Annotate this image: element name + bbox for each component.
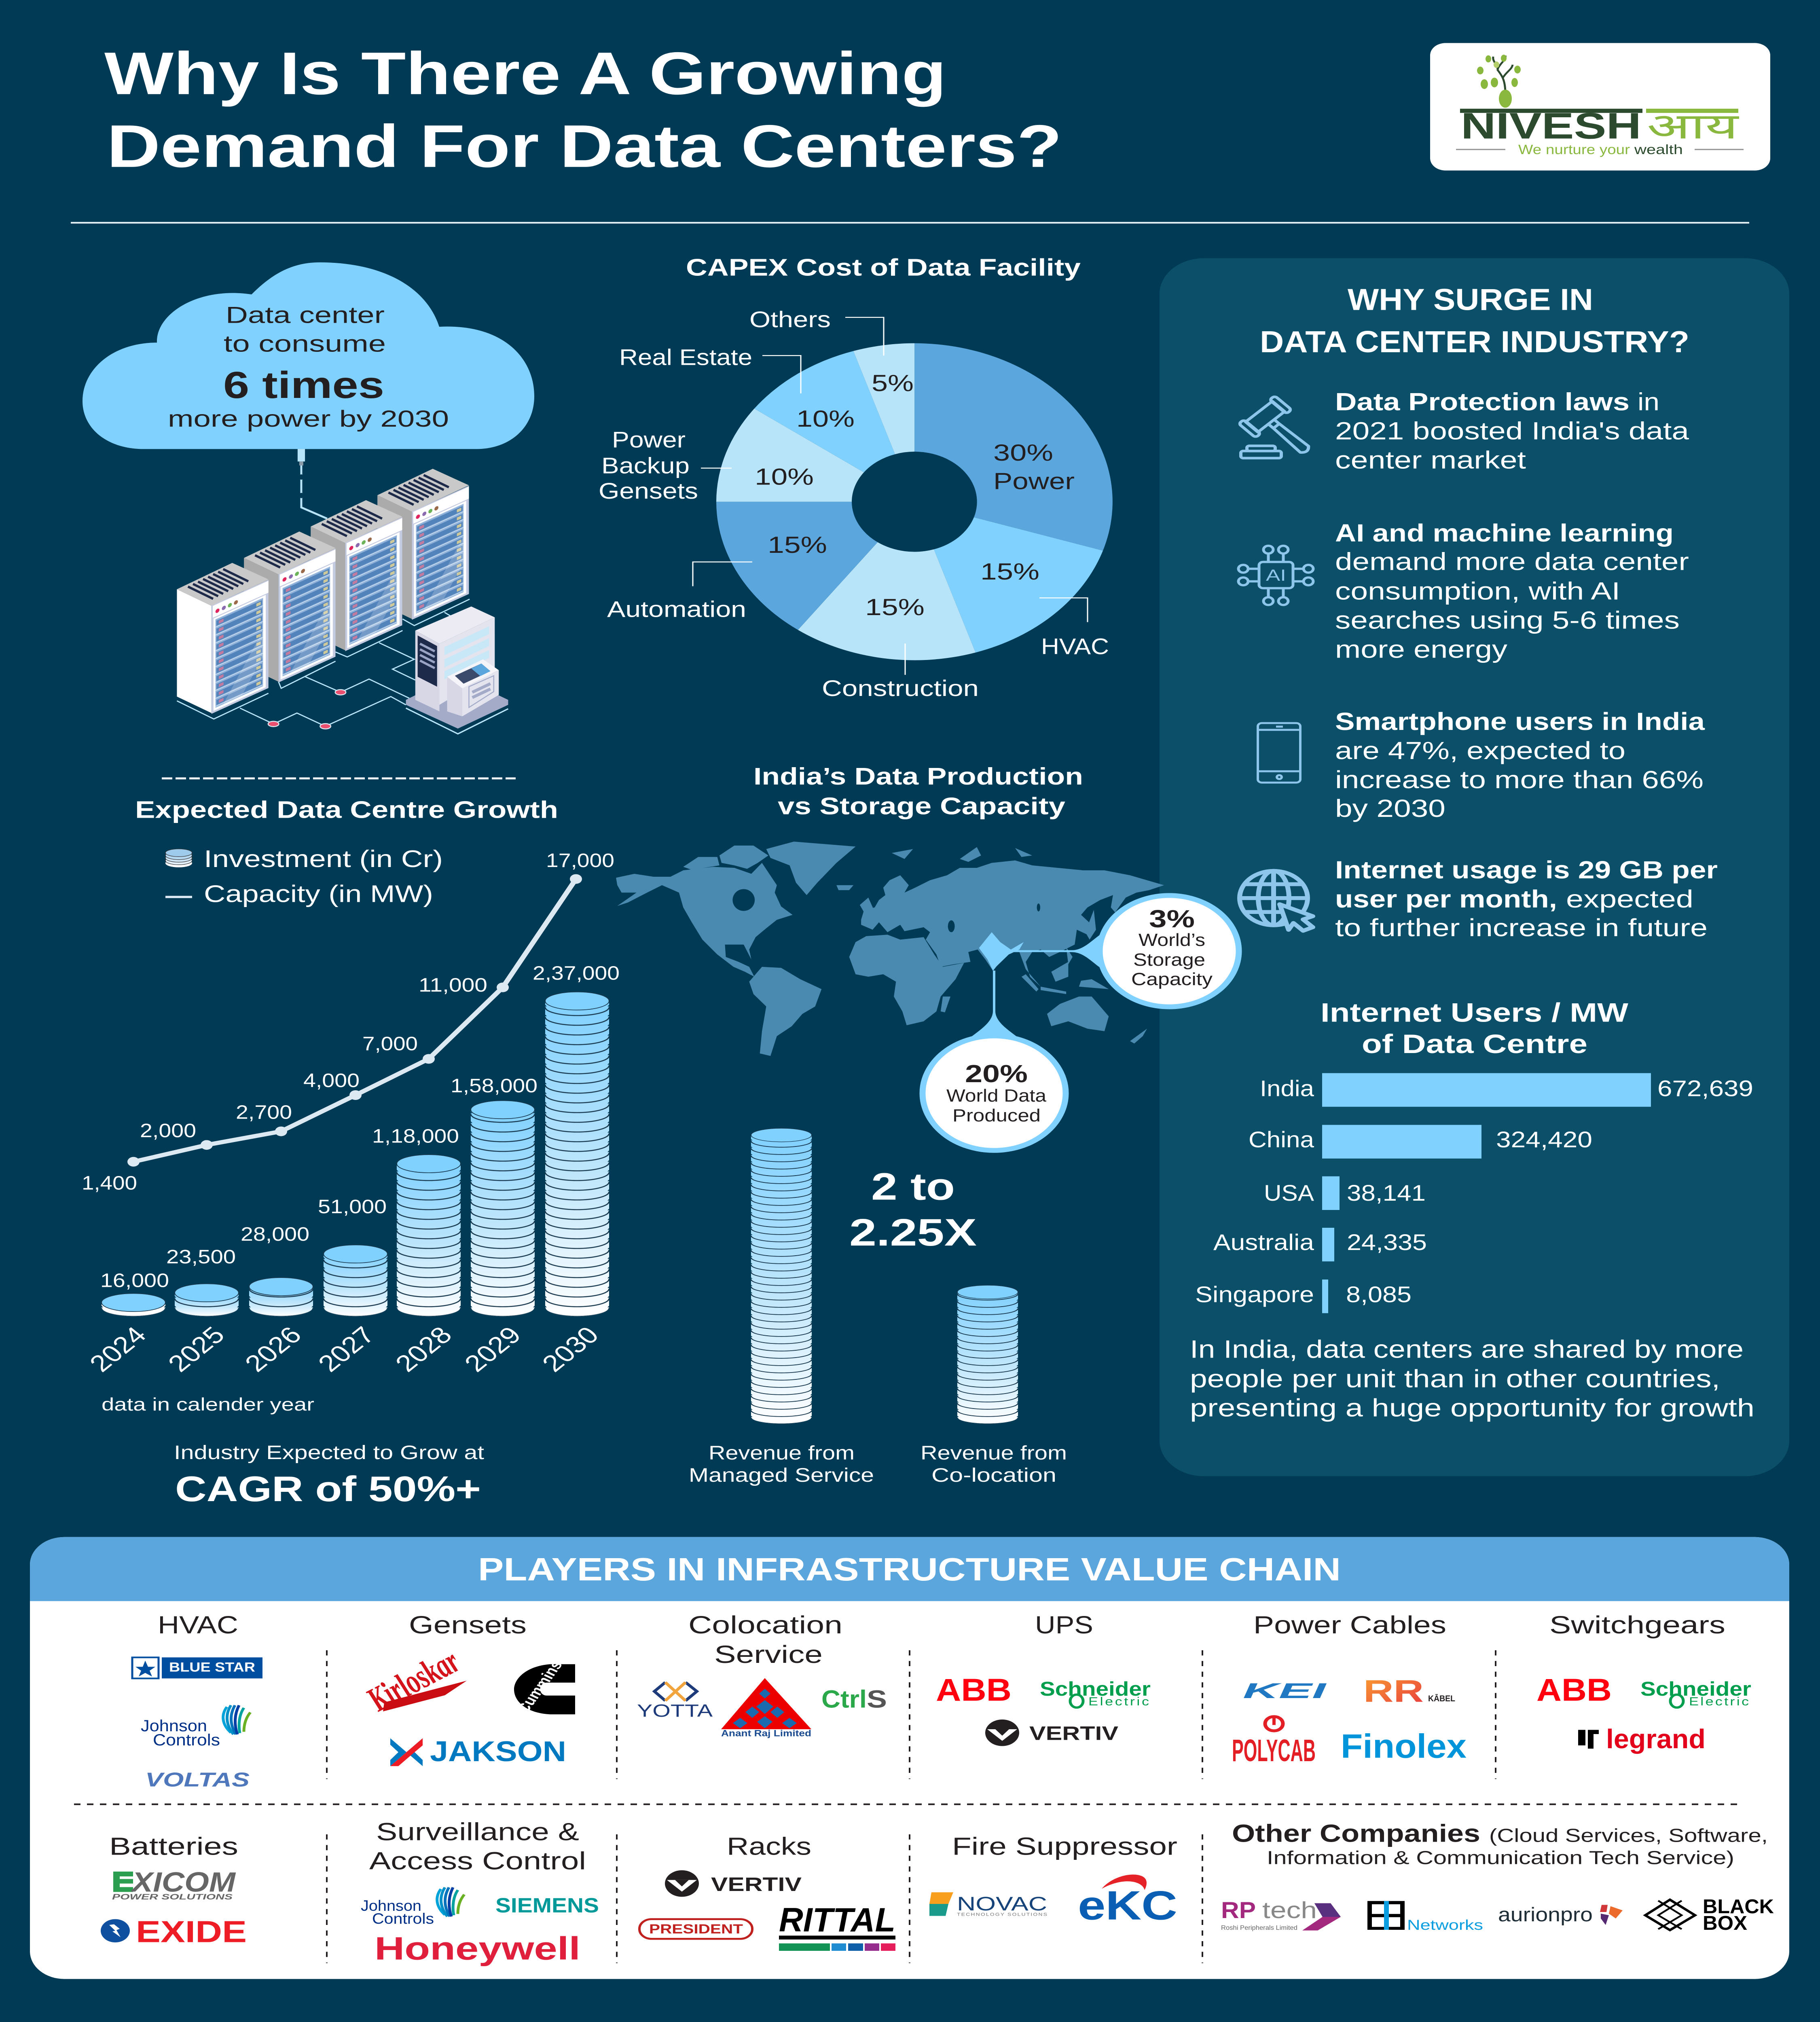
callout: 3% storage: [1100, 895, 1239, 1007]
header divider: [71, 222, 1749, 224]
icon: smartphone: [1258, 723, 1300, 783]
logo: RP tech: tech: [1262, 1897, 1317, 1923]
stack 2027: [324, 1245, 387, 1316]
bar chart: internet users per MW: 24,335: [1347, 1230, 1427, 1255]
callout: 20% data produced: World Data: [946, 1086, 1047, 1106]
year axis labels: 2028: [389, 1322, 458, 1377]
callout: 2 to 2.25X: 2 to: [871, 1165, 955, 1208]
illustration: server racks: [177, 449, 508, 734]
category headings: Surveillance &: [376, 1818, 579, 1846]
segment labels: HVAC: [1041, 634, 1109, 659]
logo: RP tech: Roshi Peripherals Limited: [1221, 1924, 1297, 1931]
text: AI and machine learning: AI and machine learning: [1335, 519, 1674, 547]
stack captions: [689, 1442, 1067, 1486]
category headings: Racks: [727, 1833, 811, 1860]
capacity and investment value labels: 11,000: [419, 974, 487, 996]
capacity and investment value labels: 2,37,000: [533, 962, 620, 984]
console unit: [406, 607, 508, 734]
bar chart: internet users per MW: 38,141: [1347, 1180, 1426, 1206]
panel heading: WHY SURGE IN: [1348, 283, 1593, 317]
logo: Kirloskar: [358, 1643, 469, 1718]
text: internet usage: expected: [1566, 885, 1693, 913]
stack captions: Co-location: [931, 1464, 1056, 1486]
callout: 3% storage: 3%: [1149, 905, 1195, 933]
logo: networks: [1367, 1901, 1483, 1933]
text: AI and machine learning: [1335, 519, 1689, 663]
segment labels: Others: [749, 307, 831, 332]
cable from cloud: [298, 449, 327, 518]
capacity and investment value labels: 4,000: [303, 1070, 360, 1091]
year axis labels: 2027: [312, 1322, 381, 1377]
text: India data center note: people per unit than in other countries,: [1190, 1364, 1720, 1393]
logo: Schneider Electric (UPS): Schneider: [1040, 1677, 1151, 1700]
callout: 20% data produced: Produced: [952, 1106, 1041, 1125]
category headings: Switchgears: [1549, 1611, 1725, 1639]
capacity and investment value labels: 23,500: [166, 1246, 236, 1268]
text: data protection laws: Data Protection laws: [1335, 388, 1630, 416]
callout: 3% storage: Capacity: [1131, 970, 1213, 989]
logo: Schneider Electric (switchgears): Electric: [1689, 1694, 1749, 1708]
cloud callout: more power by 2030: [168, 406, 449, 432]
title: Why Is There A Growing: [104, 40, 946, 107]
logo: Cummins: Cummins: [514, 1658, 566, 1716]
capacity and investment value labels: 17,000: [546, 850, 614, 871]
logo: Johnson Controls: Controls: [153, 1731, 220, 1749]
logo: President: PRESIDENT: [649, 1922, 743, 1936]
stack 2030: [545, 992, 609, 1316]
year axis labels: [83, 1322, 605, 1377]
stack captions: Managed Service: [689, 1464, 874, 1486]
tagline: We nurture your: [1518, 142, 1630, 157]
text: India data center note: In India, data centers are shared by more: [1190, 1335, 1744, 1363]
logo: Schneider Electric (switchgears): [1640, 1677, 1751, 1708]
stack 2029: [471, 1101, 535, 1316]
bar chart: internet users per MW: 324,420: [1496, 1127, 1592, 1152]
segment labels: Construction: [822, 676, 979, 701]
CAGR callout: [174, 1442, 484, 1509]
text: AI and machine learning: demand more data center: [1335, 548, 1689, 575]
bar chart: internet users per MW: Australia: [1213, 1230, 1314, 1255]
logo: Yotta: YOTTA: [637, 1701, 713, 1721]
logo: Vertiv (racks): [665, 1870, 802, 1897]
world map: [616, 842, 1164, 1056]
logo: RP tech: [1221, 1897, 1341, 1931]
bar chart: internet users per MW: India: [1260, 1076, 1314, 1101]
bar chart: internet users per MW: USA: [1264, 1180, 1314, 1206]
logo: Black Box: BOX: [1703, 1912, 1747, 1934]
category headings: Fire Suppressor: [952, 1833, 1177, 1860]
wordmark: [1460, 105, 1740, 146]
CAGR callout: Industry Expected to Grow at: [174, 1442, 484, 1464]
wordmark: आय: [1647, 107, 1740, 146]
logo: Jakson: JAKSON: [430, 1736, 566, 1767]
line chart: capacity: [127, 874, 582, 1167]
logo: Schneider Electric (switchgears): Schneider: [1640, 1677, 1751, 1700]
coin stack: managed service revenue: [751, 1128, 812, 1424]
logo: Legrand: legrand: [1606, 1724, 1706, 1754]
chart heading: CAPEX Cost of Data Facility: [686, 254, 1081, 281]
logo: Exide: EXIDE: [136, 1915, 247, 1949]
logo: Johnson Controls: [141, 1705, 250, 1749]
year axis labels: 2025: [162, 1322, 231, 1377]
category headings: (Cloud Services, Software,: [1489, 1825, 1768, 1846]
text: internet usage: user per month,: [1335, 885, 1557, 913]
stem to 3%: [1011, 933, 1102, 969]
text: internet usage: to further increase in future: [1335, 914, 1708, 941]
logo: Nivesh Aay: [1430, 43, 1770, 171]
chart footnote: data in calender year: [102, 1394, 314, 1415]
logo: Johnson Controls (surveillance): Johnson: [361, 1897, 421, 1914]
text: internet usage: Internet usage is 29 GB per: [1335, 856, 1718, 884]
text: smartphone users: are 47%, expected to: [1335, 737, 1625, 764]
chart heading: of Data Centre: [1362, 1029, 1587, 1059]
logo: Black Box: [1645, 1895, 1774, 1934]
logo: EKC: eKC: [1078, 1883, 1177, 1928]
icon: tree: [1477, 55, 1521, 108]
legend: [165, 846, 443, 907]
callout: 3% storage: World’s: [1139, 931, 1205, 950]
segment values: [755, 370, 1075, 620]
legend: Capacity (in MW): [204, 880, 433, 907]
capacity and investment value labels: 1,400: [82, 1172, 137, 1194]
year axis labels: 2026: [239, 1322, 307, 1377]
logo: Yotta: [637, 1682, 713, 1721]
logo: Legrand: [1578, 1724, 1706, 1754]
capacity and investment value labels: 28,000: [241, 1223, 309, 1245]
row divider: [74, 1803, 1740, 1805]
cloud callout: to consume: [224, 330, 386, 357]
text: India data center note: presenting a huge opportunity for growth: [1190, 1394, 1754, 1422]
heading: India's data production vs storage capacity: India’s Data Production: [753, 763, 1083, 790]
rack 2: [244, 531, 336, 683]
category headings: Power Cables: [1253, 1611, 1446, 1639]
stack 2028: [397, 1155, 461, 1316]
title: Demand For Data Centers?: [107, 113, 1062, 180]
bar chart: internet users per MW: [1195, 998, 1753, 1313]
segment labels: [599, 307, 1109, 701]
stem to 20%: [969, 971, 1019, 1038]
cloud callout: Data center: [226, 302, 385, 328]
India: [979, 932, 1024, 971]
logo: Aurionpro: aurionpro: [1498, 1903, 1593, 1926]
pie chart: CAPEX cost: [599, 254, 1113, 701]
chart heading: expected data centre growth: Expected Data Centre Growth: [135, 796, 558, 823]
text: data protection laws: center market: [1335, 446, 1526, 474]
category headings: Gensets: [409, 1611, 527, 1639]
logo: Siemens: SIEMENS: [495, 1894, 599, 1917]
category headings: Other Companies: [1232, 1820, 1480, 1847]
circuit lines: [177, 599, 470, 726]
heading: India's data production vs storage capacity: [753, 763, 1083, 820]
capacity and investment value labels: 1,58,000: [451, 1075, 538, 1096]
chart heading: Internet Users / MW: [1321, 998, 1629, 1028]
pie segments: [716, 343, 1113, 660]
segment labels: Power: [612, 427, 686, 453]
logo: ABB (UPS): ABB: [936, 1672, 1012, 1707]
year axis labels: 2030: [536, 1322, 605, 1377]
logo: Kirloskar: Kirloskar: [358, 1643, 469, 1718]
segment values: Power: [993, 468, 1075, 494]
rack 4: [377, 469, 469, 620]
text: data protection laws: [1335, 388, 1689, 474]
logo: Vertiv (UPS): VERTIV: [1029, 1722, 1118, 1744]
capacity and investment value labels: 1,18,000: [372, 1125, 459, 1147]
callout: 2 to 2.25X: [849, 1165, 977, 1254]
category headings: [109, 1611, 1768, 1875]
text: smartphone users: by 2030: [1335, 795, 1445, 822]
capacity and investment value labels: 2,000: [140, 1120, 196, 1142]
panel header band: [30, 1537, 1789, 1601]
segment values: 30%: [993, 440, 1053, 466]
logo: Polycab: [1232, 1717, 1316, 1768]
segment labels: Automation: [607, 597, 746, 622]
wordmark: NIVESH: [1461, 105, 1641, 146]
text: smartphone users: increase to more than 66%: [1335, 766, 1704, 793]
heading: India's data production vs storage capacity: vs Storage Capacity: [778, 793, 1065, 820]
text: AI and machine learning: searches using 5-6 times: [1335, 607, 1680, 634]
rack 1: [177, 563, 269, 714]
callout: 3% storage: Storage: [1133, 950, 1205, 970]
logo: KEI: KEI: [1243, 1679, 1327, 1703]
category headings: HVAC: [158, 1611, 238, 1639]
icon: gavel: [1239, 396, 1325, 465]
text: smartphone users: [1335, 708, 1705, 822]
cloud callout: [83, 262, 534, 449]
icon: AI chip: [1238, 546, 1313, 605]
segment values: 15%: [865, 594, 925, 620]
text: AI and machine learning: more energy: [1335, 636, 1508, 663]
logo: Johnson Controls (surveillance): Controls: [372, 1910, 434, 1927]
tagline: wealth: [1634, 142, 1683, 157]
logo: Voltas: VOLTAS: [145, 1768, 250, 1791]
section divider: [162, 777, 516, 780]
text: data protection laws: in: [1638, 388, 1659, 416]
callout: 20% data produced: 20%: [965, 1060, 1028, 1087]
segment values: 15%: [980, 558, 1039, 584]
capacity and investment value labels: 16,000: [100, 1269, 169, 1291]
callout: 2 to 2.25X: 2.25X: [849, 1211, 977, 1254]
segment values: 10%: [796, 406, 855, 432]
panel heading: DATA CENTER INDUSTRY?: [1260, 325, 1689, 359]
category headings: Batteries: [109, 1833, 238, 1860]
chart heading: [1321, 998, 1629, 1059]
bar chart: internet users per MW: China: [1249, 1127, 1314, 1152]
logo: RR Kabel: KĀBEL: [1428, 1694, 1455, 1703]
segment labels: Real Estate: [619, 345, 752, 370]
category headings: Colocation: [688, 1611, 842, 1639]
logo: RR Kabel: [1363, 1674, 1455, 1709]
logo: Blue Star: BLUE STAR: [169, 1660, 255, 1675]
panel: why surge in data center industry: [1160, 258, 1789, 1476]
legend coin: [165, 849, 192, 867]
year axis labels: 2024: [83, 1322, 152, 1377]
year axis labels: 2029: [458, 1322, 527, 1377]
stack captions: Revenue from: [709, 1442, 855, 1464]
coin stack: co-location revenue: [957, 1285, 1018, 1424]
logo: Vertiv (UPS): [985, 1720, 1118, 1746]
bar chart: internet users per MW: 672,639: [1657, 1076, 1753, 1101]
logo: Honeywell: Honeywell: [375, 1931, 580, 1967]
logo: CtrlS: Ctrl: [821, 1686, 867, 1713]
callout: 20% data produced: [923, 1036, 1066, 1151]
panel title: PLAYERS IN INFRASTRUCTURE VALUE CHAIN: [478, 1551, 1341, 1588]
cloud callout: 6 times: [223, 364, 384, 406]
logo: Rittal: RITTAL: [779, 1901, 895, 1939]
logo: Johnson Controls: Johnson: [141, 1717, 207, 1735]
panel: players in infrastructure value chain: POLYCAB: [1232, 1733, 1316, 1768]
capacity and investment value labels: 51,000: [318, 1196, 387, 1218]
text: data protection laws: 2021 boosted India's data: [1335, 417, 1689, 445]
segment labels: Backup: [601, 453, 690, 478]
logo: Johnson Controls (surveillance): [361, 1887, 464, 1927]
logo: Novac: NOVAC: [957, 1893, 1047, 1915]
logo: Schneider Electric (UPS): [1040, 1677, 1151, 1708]
logo: Exicom: XICOM: [130, 1867, 236, 1898]
segment values: 15%: [768, 532, 827, 558]
logo: Schneider Electric (UPS): Electric: [1088, 1694, 1149, 1708]
logo: Exicom: POWER SOLUTIONS: [112, 1892, 233, 1901]
logo: ABB (switchgears): ABB: [1536, 1672, 1612, 1707]
capacity and investment value labels: 2,700: [236, 1101, 292, 1123]
panel: players in infrastructure value chain: [30, 1537, 1789, 1979]
category headings: Service: [714, 1641, 823, 1668]
tagline: [1456, 142, 1744, 157]
text: India data center note: [1190, 1335, 1754, 1422]
rack 3: [311, 500, 402, 651]
icon: globe with cursor: [1240, 871, 1313, 931]
logo: CtrlS: S: [867, 1686, 887, 1713]
stack captions: Revenue from: [921, 1442, 1067, 1464]
capacity and investment value labels: 7,000: [362, 1033, 418, 1054]
text: smartphone users: Smartphone users in India: [1335, 708, 1705, 735]
segment values: 10%: [755, 463, 814, 490]
legend: Investment (in Cr): [204, 846, 443, 872]
capacity and investment value labels: [82, 850, 620, 1291]
logo: Finolex: Finolex: [1341, 1727, 1467, 1765]
text: internet usage: [1335, 856, 1718, 941]
text: AI and machine learning: consumption, with AI: [1335, 577, 1620, 605]
logo: Anant Raj: [721, 1678, 811, 1739]
logo: RP tech: RP: [1221, 1897, 1256, 1923]
logo: RR Kabel: RR: [1363, 1674, 1424, 1709]
logo: Black Box: BLACK: [1703, 1895, 1774, 1918]
logo: President: [639, 1919, 752, 1939]
title: [104, 40, 1062, 180]
CAGR callout: CAGR of 50%+: [175, 1469, 481, 1509]
logo: networks: Networks: [1407, 1917, 1483, 1933]
bar chart: internet users per MW: 8,085: [1346, 1282, 1412, 1307]
stack 2026: [249, 1277, 313, 1316]
stack 2025: [175, 1284, 239, 1316]
logo: Novac: [929, 1892, 1047, 1917]
category headings: Access Control: [369, 1847, 586, 1875]
segment values: 5%: [872, 370, 914, 396]
category headings: Information & Communication Tech Service): [1267, 1847, 1734, 1868]
leader lines: [693, 317, 1088, 675]
logo: Novac: TECHNOLOGY SOLUTIONS: [957, 1912, 1047, 1917]
category headings: UPS: [1035, 1611, 1093, 1639]
bar chart: internet users per MW: Singapore: [1195, 1282, 1314, 1307]
column dividers: [327, 1650, 1496, 1963]
circuit nodes: [268, 690, 346, 729]
segment labels: Gensets: [599, 478, 698, 503]
panel heading: [1260, 283, 1689, 359]
logo: Rittal: [779, 1901, 895, 1951]
icon: AI chip: AI: [1266, 566, 1286, 584]
stack 2024: [102, 1293, 165, 1316]
logo: Vertiv (racks): VERTIV: [711, 1874, 802, 1895]
India highlight and callout stems: [969, 932, 1102, 1038]
logo: Blue Star: [132, 1657, 262, 1678]
coin stacks: investment: [102, 992, 609, 1316]
logo: Anant Raj: Anant Raj Limited: [721, 1728, 811, 1739]
